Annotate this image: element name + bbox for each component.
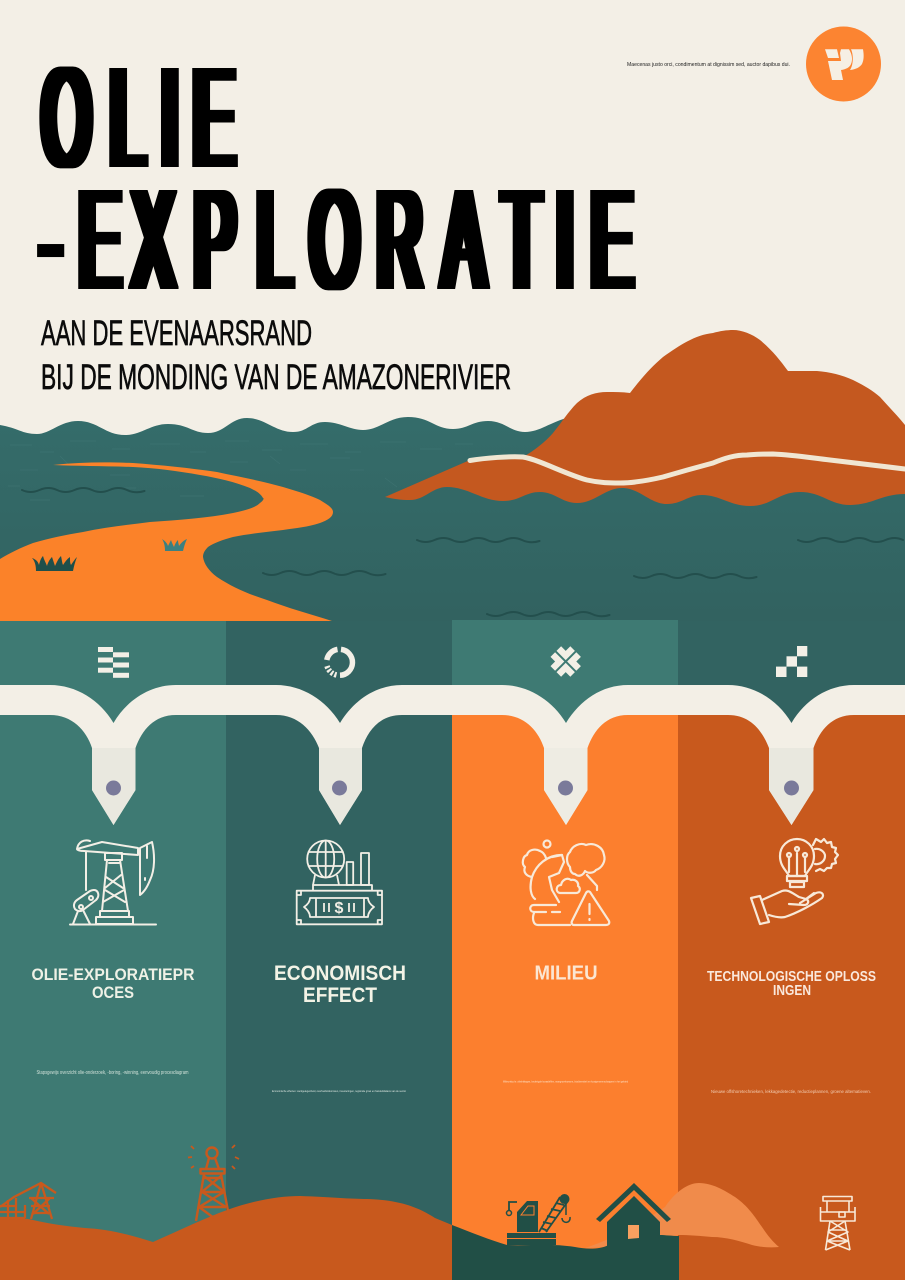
title: -EXPLORATIE: [40, 161, 633, 319]
heading: column 4: TECHNOLOGISCHE OPLOSS: [707, 969, 876, 985]
icon: stair bars: [98, 647, 129, 678]
subtitle: AAN DE EVENAARSRAND: [41, 314, 312, 353]
icon: house: [596, 1183, 671, 1248]
panel: column 4: [678, 715, 905, 1280]
pin dot 3: [558, 780, 573, 796]
title: [40, 39, 633, 319]
icon: crane: [506, 1194, 570, 1245]
heading: column 4: INGEN: [773, 983, 811, 999]
subtitle: [41, 314, 511, 397]
panel: column 2: [226, 621, 452, 1280]
dollar sign: $: [335, 900, 344, 917]
panel: column 3 top: [452, 620, 678, 728]
hill: left orange ground: [0, 1196, 452, 1280]
icon: earth, clouds and warning: [523, 840, 609, 925]
water ripples: [22, 488, 903, 616]
icon: checker steps: [776, 646, 807, 677]
icon: flower cross: [546, 642, 585, 681]
heading: column 4: [707, 969, 876, 999]
panel: column 3: [452, 715, 678, 1280]
hill: light orange: [585, 1183, 779, 1248]
icon: globe and banknote: [297, 840, 382, 924]
body text: column 3: Milieurisico's: olielekkages, bedreigde koraalriffen, mangrovebossen, biodiversiteit en kustgemeenschappen in het gebied: [503, 1080, 629, 1084]
panel: column 1: [0, 621, 226, 1280]
icon: oil derrick: [188, 1145, 239, 1221]
heading: column 1: OLIE-EXPLORATIEPR: [32, 965, 194, 984]
icon: hand with bulb and gear: [751, 839, 838, 924]
body text: column 2: Economische effecten: werkgelegenheid, overheidsinkomsten, investeringen, regionale groei en handelsbalans van de sector: [272, 1090, 406, 1093]
panel: column 4 top: [678, 621, 905, 728]
pin shade 3: [544, 748, 588, 825]
pin dot 2: [332, 780, 347, 796]
heading: column 2: EFFECT: [303, 984, 377, 1007]
pin shade 1: [92, 748, 136, 825]
mountain: [385, 330, 905, 520]
heading: column 1: [32, 965, 194, 1002]
pin shade 4: [769, 748, 814, 825]
subtitle: BIJ DE MONDING VAN DE AMAZONERIVIER: [41, 358, 511, 397]
connector band: [0, 685, 905, 825]
icon: fallen pylon: [0, 1183, 56, 1220]
heading: column 3: MILIEU: [534, 962, 598, 984]
grass: teal tuft: [162, 539, 187, 551]
river: [0, 462, 333, 621]
heading: column 2: [274, 962, 406, 1007]
landscape: back water: [0, 417, 570, 640]
icon: watch tower: [820, 1196, 855, 1250]
landscape: front water: [385, 487, 905, 640]
heading: column 2: ECONOMISCH: [274, 962, 406, 985]
top-right caption: Maecenas justo orci, condimentum at dignissim sed, auctor dapibus dui.: [627, 62, 790, 68]
body text: column 4: Nieuwe offshoretechnieken, lekkagedetectie, reductieplannen, groene alternatieven.: [711, 1089, 871, 1095]
logo: [806, 26, 881, 102]
hill: dark green ground: [452, 1225, 679, 1280]
title: OLIE: [42, 39, 235, 197]
body text: column 1: Stapsgewijs overzicht olie-onderzoek, -boring, -winning, eenvoudig procesdiagram: [36, 1070, 188, 1076]
icon: segmented ring: [327, 649, 352, 675]
pin dot 1: [106, 780, 121, 796]
water texture: [8, 441, 473, 500]
grass: dark tuft: [32, 556, 77, 571]
icon: oil pump: [70, 840, 156, 924]
road: [470, 454, 905, 483]
heading: column 1: OCES: [92, 983, 134, 1002]
pin dot 4: [784, 780, 799, 796]
pin shade 2: [319, 748, 362, 825]
